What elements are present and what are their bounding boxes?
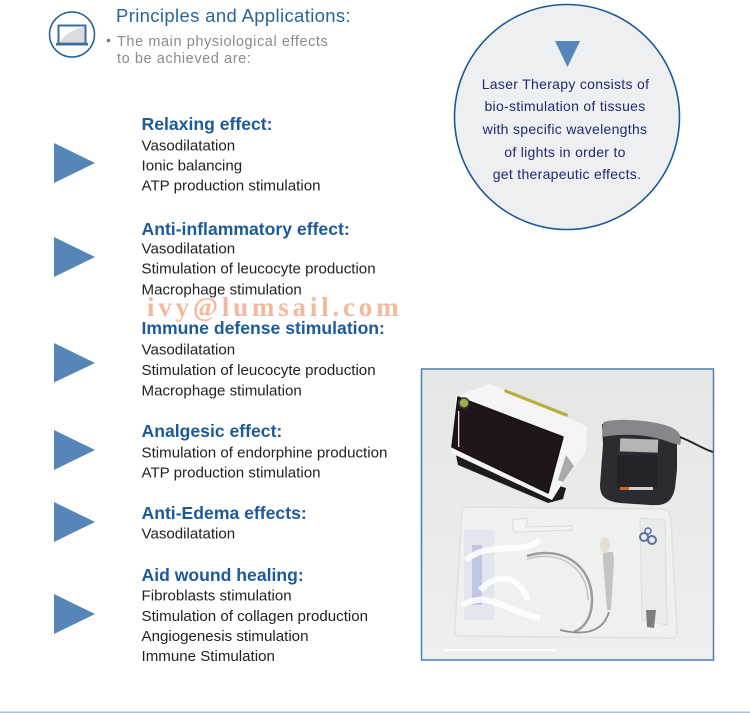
footer rule <box>0 712 750 713</box>
effect: aid wound healing: Angiogenesis stimulation <box>142 628 308 645</box>
callout: laser therapy circle <box>454 4 680 230</box>
effect: anti-inflammatory: Macrophage stimulation <box>142 282 302 298</box>
subtitle text: The main physiological effects <box>117 34 328 50</box>
effect: aid wound healing: Aid wound healing: <box>142 565 304 585</box>
effect: anti-edema: Anti-Edema effects: <box>142 503 307 523</box>
effect: relaxing: Vasodilatation <box>142 138 235 154</box>
effect: immune defense: Immune defense stimulation: <box>142 318 385 338</box>
callout: laser therapy circle: bio-stimulation of tissues <box>484 98 646 114</box>
callout: laser therapy circle: Laser Therapy consists of <box>482 76 649 92</box>
effect: aid wound healing: Fibroblasts stimulation <box>142 588 292 604</box>
subtitle text <box>107 34 328 67</box>
effect: immune defense: Vasodilatation <box>142 342 235 358</box>
effect: anti-edema: Vasodilatation <box>142 526 235 542</box>
effect: relaxing <box>54 114 320 194</box>
effect: analgesic: ATP production stimulation <box>142 464 320 482</box>
effect: anti-inflammatory: Stimulation of leucocyte production <box>142 260 376 278</box>
effect: relaxing: Ionic balancing <box>142 158 242 174</box>
callout: laser therapy circle: with specific wavelengths <box>482 121 647 137</box>
callout: laser therapy circle: get therapeutic effects. <box>493 166 641 182</box>
effect: anti-edema <box>54 502 307 542</box>
accessory tray <box>443 507 677 651</box>
foot pedal <box>600 420 713 505</box>
effect: relaxing: ATP production stimulation <box>142 178 320 194</box>
effect: immune defense: Macrophage stimulation <box>142 382 302 400</box>
title: Principles and Applications: <box>116 5 351 26</box>
effect: anti-inflammatory: Vasodilatation <box>142 240 235 258</box>
icon: laptop in circle <box>50 12 94 57</box>
effect: analgesic: Stimulation of endorphine production <box>142 444 387 462</box>
laser device <box>451 384 587 503</box>
effect: immune defense: Stimulation of leucocyte production <box>142 362 376 379</box>
effect: aid wound healing: Immune Stimulation <box>142 648 275 665</box>
effect: analgesic: Analgesic effect: <box>142 421 282 441</box>
effect: relaxing: Relaxing effect: <box>142 114 273 134</box>
effect: anti-inflammatory <box>54 219 376 298</box>
watermark: ivy@lumsail.com <box>147 292 402 322</box>
callout: laser therapy circle: of lights in order to <box>504 144 626 160</box>
effect: analgesic <box>54 421 387 482</box>
effect: aid wound healing: Stimulation of collagen production <box>142 608 368 625</box>
product photo <box>422 369 714 660</box>
effect: aid wound healing <box>54 565 368 665</box>
subtitle text: to be achieved are: <box>117 51 251 67</box>
effect: immune defense <box>54 318 385 400</box>
icon: down triangle <box>555 41 580 67</box>
effect: anti-inflammatory: Anti-inflammatory effect: <box>142 219 350 239</box>
